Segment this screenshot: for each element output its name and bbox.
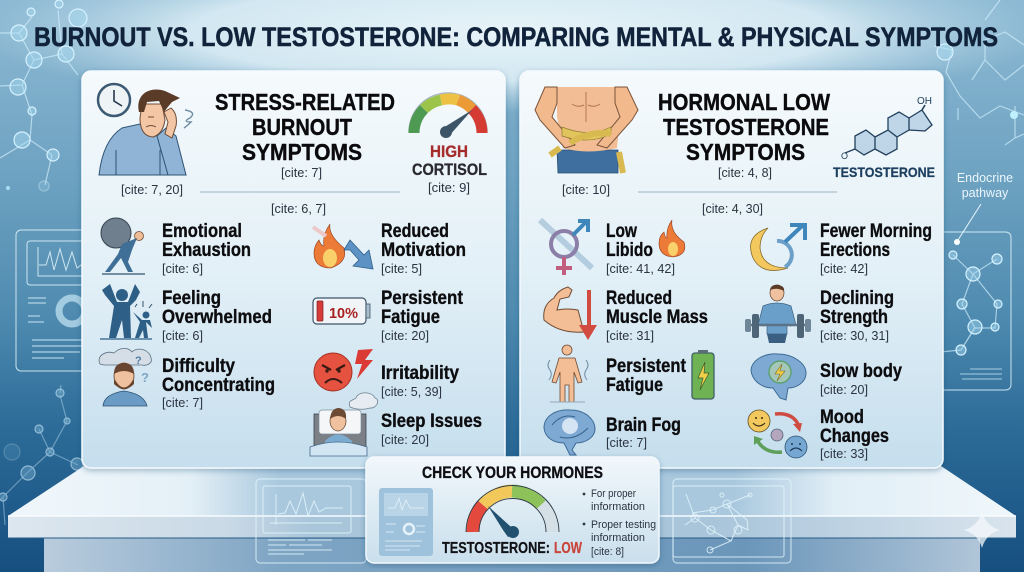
text: mood changes — [820, 407, 889, 461]
text: slow body — [820, 361, 902, 397]
text: irritability: Irritability — [381, 363, 459, 384]
text: low libido: [cite: 41, 42] — [606, 262, 675, 276]
text: difficulty concentrating: Concentrating — [162, 375, 275, 396]
icon: cortisol gauge — [409, 93, 487, 138]
text: difficulty concentrating — [162, 356, 275, 410]
symptom: mood changes — [748, 410, 807, 458]
symptom: reduced muscle mass — [544, 287, 597, 340]
label: high cortisol — [412, 142, 487, 195]
text: difficulty concentrating: Difficulty — [162, 356, 235, 377]
text: emotional exhaustion: Emotional — [162, 221, 242, 242]
text: feeling overwhelmed: Feeling — [162, 288, 221, 309]
bullet list: Proper testing — [591, 519, 656, 531]
text: fewer morning erections — [820, 221, 932, 276]
molecule panel: right — [940, 232, 1011, 390]
icon: torso with measuring tape — [535, 87, 638, 173]
icon: report document — [379, 488, 433, 556]
text: reduced muscle mass: [cite: 31] — [606, 329, 654, 343]
text: low libido: Low — [606, 221, 637, 242]
symptom: difficulty concentrating: ? — [135, 355, 142, 367]
icon: green battery — [692, 350, 714, 399]
heading: TESTOSTERONE — [663, 114, 829, 140]
text: declining strength — [820, 288, 894, 343]
dashboard panel: left — [16, 230, 96, 371]
sparkle — [964, 512, 1000, 548]
text: persistent fatigue — [606, 356, 687, 396]
text: fewer morning erections: Fewer Morning — [820, 221, 932, 242]
text: declining strength: [cite: 30, 31] — [820, 329, 889, 343]
text: irritability: [cite: 5, 39] — [381, 385, 442, 399]
chart hologram: table left — [256, 479, 366, 563]
bullet list — [583, 488, 656, 558]
symptom: persistent fatigue body — [548, 345, 588, 402]
molecule network: upper right — [934, 0, 1024, 145]
table — [8, 466, 1016, 572]
heading: HORMONAL LOW — [658, 89, 830, 115]
text: persistent fatigue: Fatigue — [606, 375, 663, 396]
label: testosterone low: TESTOSTERONE: — [442, 540, 550, 557]
text: persistent fatigue: [cite: 20] — [381, 329, 429, 343]
text: reduced motivation: Reduced — [381, 221, 449, 242]
heading — [658, 89, 830, 180]
text: persistent fatigue — [381, 288, 464, 343]
text: mood changes: [cite: 33] — [820, 447, 868, 461]
symptom: battery 10%: 10% — [329, 305, 358, 322]
text: sleep issues: [cite: 20] — [381, 433, 429, 447]
label: testosterone: TESTOSTERONE — [833, 164, 935, 180]
icon: stressed man with clock — [98, 84, 193, 175]
symptom: sleep issues — [310, 393, 378, 456]
text: brain fog: Brain Fog — [606, 415, 681, 436]
text: sleep issues: Sleep Issues — [381, 411, 482, 432]
heading: [cite: 4, 8] — [718, 166, 772, 180]
label: endocrine pathway — [954, 171, 1013, 245]
text: reduced motivation: Motivation — [381, 240, 466, 261]
symptom: declining strength — [745, 285, 811, 343]
text: mood changes: Mood — [820, 407, 864, 428]
symptom: emotional exhaustion — [101, 218, 145, 274]
text: fewer morning erections: [cite: 42] — [820, 262, 868, 276]
callout: check your hormones — [366, 457, 659, 563]
text: reduced motivation: [cite: 5] — [381, 262, 422, 276]
icon: testosterone molecule: OH — [917, 96, 932, 107]
text: fewer morning erections: Erections — [820, 240, 890, 261]
symptom: fewer morning erections — [751, 225, 805, 270]
citation: [cite: 6, 7] — [271, 202, 326, 216]
panel: low testosterone — [520, 71, 943, 468]
text: reduced muscle mass — [606, 288, 708, 343]
symptom: difficulty concentrating — [99, 348, 151, 406]
text: reduced muscle mass: Muscle Mass — [606, 307, 708, 328]
text: difficulty concentrating: [cite: 7] — [162, 396, 203, 410]
text: persistent fatigue: Persistent — [606, 356, 687, 377]
heading: [cite: 7] — [281, 166, 322, 180]
text: slow body: [cite: 20] — [820, 383, 868, 397]
citation: [cite: 7, 20] — [121, 183, 183, 197]
text: mood changes: Changes — [820, 426, 889, 447]
symptom: low libido — [540, 220, 685, 275]
text: brain fog — [606, 415, 681, 450]
label: endocrine pathway: pathway — [962, 186, 1009, 200]
heading: STRESS-RELATED — [215, 89, 395, 115]
bullet list: information — [591, 532, 645, 544]
text: feeling overwhelmed: Overwhelmed — [162, 307, 272, 328]
symptom: brain fog — [544, 410, 595, 455]
panel: burnout — [82, 71, 505, 468]
text: feeling overwhelmed: [cite: 6] — [162, 329, 203, 343]
molecule network: upper left — [0, 0, 87, 191]
text: sleep issues — [381, 411, 482, 447]
text: reduced motivation — [381, 221, 466, 276]
heading: SYMPTOMS — [686, 139, 805, 165]
text: brain fog: [cite: 7] — [606, 436, 647, 450]
symptom: battery 10% — [313, 298, 370, 324]
symptom: reduced motivation — [313, 224, 373, 269]
callout heading: CHECK YOUR HORMONES — [422, 463, 603, 482]
label: high cortisol: [cite: 9] — [428, 181, 470, 195]
molecule hologram: table right — [673, 479, 791, 563]
heading: BURNOUT — [252, 114, 352, 140]
text: emotional exhaustion — [162, 221, 251, 276]
label: testosterone low: LOW — [554, 540, 582, 557]
chart: testosterone gauge — [466, 486, 559, 538]
text: irritability — [381, 363, 459, 399]
heading — [215, 89, 395, 180]
symptom: feeling overwhelmed — [100, 284, 152, 339]
heading: SYMPTOMS — [242, 139, 362, 165]
label: endocrine pathway: Endocrine — [957, 171, 1013, 185]
text: low libido — [606, 221, 675, 276]
symptom: difficulty concentrating: ? — [141, 370, 149, 385]
label: high cortisol: CORTISOL — [412, 160, 487, 179]
text: reduced muscle mass: Reduced — [606, 288, 672, 309]
bullet list: information — [591, 501, 645, 513]
text: slow body: Slow body — [820, 361, 902, 382]
icon: testosterone molecule: O — [841, 151, 848, 161]
text: feeling overwhelmed — [162, 288, 272, 343]
symptom: slow body brain — [751, 354, 806, 400]
bullet list: [cite: 8] — [591, 546, 624, 558]
symptom: irritability — [314, 349, 373, 391]
text: persistent fatigue: Fatigue — [381, 307, 440, 328]
text: low libido: Libido — [606, 240, 653, 261]
text: emotional exhaustion: [cite: 6] — [162, 262, 203, 276]
text: declining strength: Declining — [820, 288, 894, 309]
text: emotional exhaustion: Exhaustion — [162, 240, 251, 261]
text: declining strength: Strength — [820, 307, 888, 328]
molecule network: lower left — [0, 385, 83, 525]
citation: [cite: 10] — [562, 183, 610, 197]
citation: [cite: 4, 30] — [702, 202, 763, 216]
bullet list: For proper — [591, 488, 636, 500]
text: persistent fatigue: Persistent — [381, 288, 464, 309]
label: high cortisol: HIGH — [430, 142, 468, 161]
icon: testosterone molecule — [841, 96, 932, 161]
